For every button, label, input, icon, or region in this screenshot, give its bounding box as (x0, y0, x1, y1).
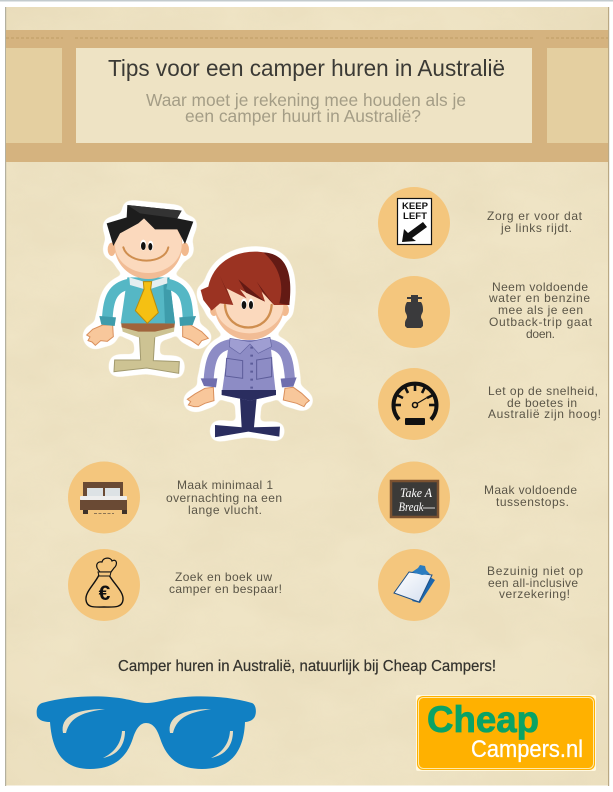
text: book: camper en bespaar! (169, 582, 282, 596)
text: water and fuel: mee als je een (498, 303, 583, 317)
logo: Cheap Campers: Cheap (427, 699, 539, 740)
subtitle (146, 90, 466, 126)
text: water and fuel (488, 280, 593, 341)
text: breaks: tussenstops. (496, 495, 569, 509)
text: keep left: je links rijdt. (500, 221, 572, 235)
call to action: Camper huren in Australië, natuurlijk bij Cheap Campers! (118, 658, 496, 675)
text: water and fuel: Neem voldoende (492, 280, 588, 294)
tip: breaks (378, 462, 577, 534)
text: keep left: Zorg er voor dat (487, 209, 583, 223)
text: speed: de boetes in (507, 396, 577, 410)
text: insurance: Bezuinig niet op (487, 564, 583, 578)
logo: Cheap Campers: Campers.nl (471, 736, 583, 763)
icon: bed (68, 462, 140, 534)
tip: overnight (68, 462, 282, 534)
icon: speedometer (378, 368, 450, 440)
tip: book (68, 549, 282, 621)
text: breaks: Maak voldoende (484, 483, 577, 497)
subtitle: een camper huurt in Australië? (185, 106, 421, 126)
text: overnight: Maak minimaal 1 (177, 478, 273, 492)
text: water and fuel: Outback-trip gaat (489, 315, 593, 329)
text: speed: Let op de snelheid, (488, 384, 598, 398)
character: man with red hair (187, 252, 309, 437)
tip: insurance (378, 549, 583, 621)
icon: take a break chalkboard: Break (398, 500, 424, 514)
icon: clipboard (378, 549, 450, 621)
text: water and fuel: doen. (526, 327, 555, 341)
text: insurance: verzekering! (499, 587, 570, 601)
text: insurance (487, 564, 583, 601)
icon: sunglasses (37, 696, 256, 769)
text: insurance: een all-inclusive (488, 576, 578, 590)
logo: Cheap Campers (416, 695, 596, 771)
text: breaks (484, 483, 577, 509)
tip: speed (378, 368, 601, 440)
subtitle: Waar moet je rekening mee houden als je (146, 90, 466, 110)
icon: money bag (68, 549, 140, 621)
icon: take a break chalkboard (378, 462, 450, 534)
character: man with tie (87, 205, 208, 373)
text: book (169, 570, 282, 596)
text: overnight: overnachting na een (166, 491, 282, 505)
title: Tips voor een camper huren in Australië (108, 55, 505, 81)
tip: keep left (378, 187, 583, 259)
header band (6, 30, 608, 162)
icon: keep left sign: KEEP (402, 201, 429, 212)
text: speed (488, 384, 601, 421)
icon: water bottle (378, 276, 450, 348)
text: speed: Australië zijn hoog! (488, 407, 601, 421)
text: keep left (487, 209, 583, 235)
icon: money bag: € (99, 582, 111, 605)
icon: take a break chalkboard: Take A (400, 486, 432, 500)
icon: keep left sign (378, 187, 450, 259)
characters (87, 205, 309, 437)
tip: water and fuel (378, 276, 593, 348)
text: book: Zoek en boek uw (175, 570, 272, 584)
text: overnight: lange vlucht. (188, 503, 262, 517)
text: overnight (166, 478, 282, 517)
icon: keep left sign: LEFT (403, 211, 427, 222)
text: water and fuel: water en benzine (488, 291, 590, 305)
